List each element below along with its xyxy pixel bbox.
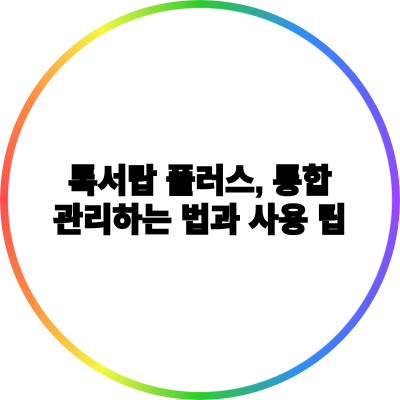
title: 톡서랍 플러스, 통합 xyxy=(68,163,332,199)
title: 관리하는 법과 사용 팁 xyxy=(53,202,347,238)
title xyxy=(53,163,347,238)
